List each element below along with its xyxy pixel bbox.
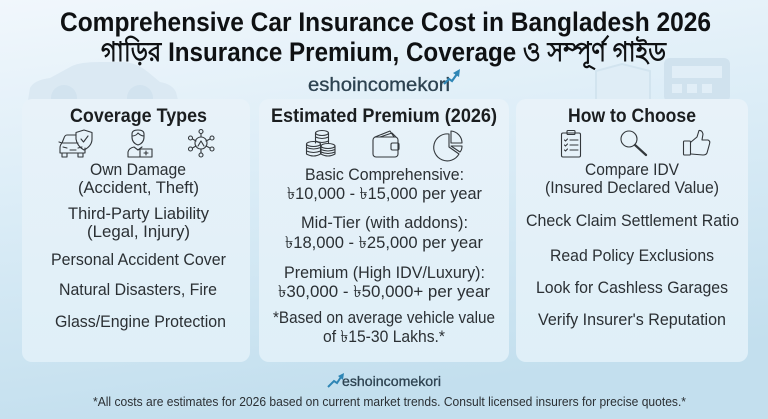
icon: pie chart	[434, 131, 462, 161]
list: premium tiers: ৳18,000 - ৳25,000 per year	[285, 234, 483, 252]
footnote: *All costs are estimates for 2026 based on current market trends. Consult licensed insurers for precise quotes.*	[93, 395, 686, 409]
list: how to choose: Verify Insurer's Reputation	[538, 311, 726, 329]
icon: wallet	[373, 131, 399, 157]
icon: network	[188, 130, 214, 157]
list: coverage types	[51, 161, 226, 331]
list: how to choose: Look for Cashless Garages	[536, 279, 728, 297]
list: premium tiers	[273, 166, 495, 346]
list: premium tiers: Premium (High IDV/Luxury):	[284, 264, 485, 282]
list: coverage types: (Accident, Theft)	[78, 179, 199, 197]
list: coverage types: Glass/Engine Protection	[55, 313, 226, 331]
logo: eshoincomekori top	[308, 69, 460, 96]
list: how to choose: Check Claim Settlement Ratio	[526, 212, 739, 230]
panel: estimated premium	[259, 99, 509, 362]
background illustration: shield	[596, 64, 650, 100]
icon: magnifying glass	[621, 131, 646, 155]
title: গাড়ির Insurance Premium, Coverage ও সম্পূর্ণ গাইড	[101, 35, 667, 70]
logo: eshoincomekori footer: eshoincomekori	[342, 373, 441, 389]
icon: person with badge	[128, 130, 152, 157]
icon: thumbs up	[684, 130, 710, 155]
list: how to choose: Compare IDV	[585, 161, 679, 179]
list: coverage types: Third-Party Liability	[68, 205, 210, 223]
list: premium tiers: of ৳15-30 Lakhs.*	[323, 328, 446, 346]
panel: how to choose	[516, 99, 748, 362]
list: premium tiers: Mid-Tier (with addons):	[301, 214, 468, 232]
list: how to choose: (Insured Declared Value)	[545, 179, 719, 197]
heading: how to choose: How to Choose	[568, 105, 696, 127]
list: coverage types: Own Damage	[90, 161, 186, 179]
title: Comprehensive Car Insurance Cost in Bangladesh 2026	[60, 7, 711, 37]
title	[60, 7, 711, 70]
heading: coverage types: Coverage Types	[70, 105, 207, 127]
panel: coverage types	[22, 99, 250, 362]
list: coverage types: (Legal, Injury)	[87, 223, 190, 241]
heading: estimated premium: Estimated Premium (2026)	[271, 105, 497, 127]
list: how to choose: Read Policy Exclusions	[550, 247, 714, 265]
icon: clipboard checklist	[562, 130, 580, 157]
list: premium tiers: Basic Comprehensive:	[305, 166, 464, 184]
list: premium tiers: ৳30,000 - ৳50,000+ per year	[278, 283, 491, 301]
list: how to choose	[526, 161, 739, 329]
icon: coins	[306, 130, 335, 156]
list: premium tiers: ৳10,000 - ৳15,000 per year	[287, 185, 482, 203]
list: coverage types: Personal Accident Cover	[51, 251, 226, 269]
background illustration: car	[28, 62, 178, 111]
list: coverage types: Natural Disasters, Fire	[59, 281, 217, 299]
background illustration: calculator	[664, 58, 730, 102]
list: premium tiers: *Based on average vehicle value	[273, 309, 495, 327]
icon: car with shield	[59, 130, 92, 157]
logo: eshoincomekori top: eshoincomekori	[308, 75, 450, 96]
